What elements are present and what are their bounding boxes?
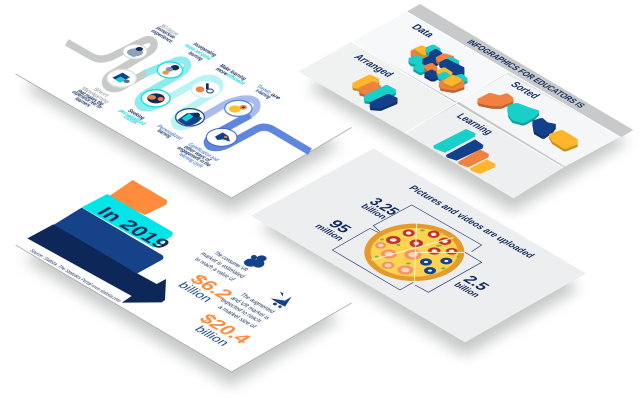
icon: people [244,255,267,268]
timeline labels: engagement in the [175,146,213,168]
chart title: Pictures and videos are uploaded [406,184,536,260]
timeline icon: person with gears [191,81,221,98]
timeline labels: Seeking [126,108,147,121]
stat: augmented and VR market: $20.4 [195,311,257,347]
timeline icon: headset [123,44,147,59]
timeline labels: learning [186,51,205,62]
panel: education timeline card [16,4,352,212]
value: 2.5 billion: billion [452,281,482,299]
stat: consumer VR market [175,251,250,304]
value: 3.25 billion: 3.25 [365,196,403,218]
timeline icon: mobile learning [157,62,183,78]
timeline labels: personalized [117,108,148,126]
leader lines [332,205,482,292]
value: 95 million: million [313,223,346,242]
year heading: In 2019 [92,205,174,252]
section: data [352,12,508,102]
label: data: Data [408,23,437,40]
timeline labels: Trends [254,84,273,95]
panel: infographics for educators card [298,4,633,212]
timeline icon: students [176,109,204,126]
timeline labels: 360-degree [158,23,181,37]
stat: augmented and VR market: a market size of [216,305,258,329]
timeline labels: experience [149,29,175,44]
panel: VR market card [16,176,352,386]
value: 95 million [313,218,355,242]
section: sorted [458,74,621,167]
timeline labels: Personalized [155,124,184,141]
timeline labels: learning [155,128,173,139]
pizza [364,223,464,281]
timeline icon: picture [107,69,136,87]
value: 95 million: 95 [324,218,355,236]
stat: consumer VR market: The consumer VR [212,251,250,273]
stat: augmented and VR market: and VR market is [228,296,272,321]
timeline labels: e-learning [253,88,273,100]
timeline labels: that makes the [75,89,106,107]
label: learning: Learning [453,112,496,136]
timeline icon: gear [225,100,252,116]
timeline labels [70,23,283,169]
icon: shopping cart [271,292,292,308]
timeline labels: more [213,67,230,77]
value: 2.5 billion: 2.5 [459,273,493,293]
cyan band [82,194,173,247]
timeline labels: mobile and global [182,43,213,61]
timeline labels: learning cycle [177,152,205,169]
timeline labels: experience real for [70,90,105,110]
timeline labels: Gamification and [186,142,221,162]
orange band [107,180,167,215]
blue band [53,208,163,273]
stat: consumer VR market: $6.2 [185,271,238,302]
stat: augmented and VR market: The augmented [238,292,276,314]
value: 2.5 billion [452,273,493,299]
timeline labels: Short [91,87,110,98]
navy arrow [27,224,166,303]
section: arranged [298,42,456,133]
timeline labels: Microlearning [79,86,111,105]
arranged stacked blocks [353,76,397,107]
timeline labels: classes [122,115,139,125]
learning bars [433,129,496,174]
section: learning [405,104,563,198]
header band [407,4,633,137]
timeline labels: Incorporating [191,42,218,58]
stat: augmented and VR market: expected to reach [218,298,263,324]
source note: Source: Statista, The Statistics Portal www.statista.com [28,249,122,303]
label: sorted: Sorted [507,80,542,100]
panel: pizza chart card [251,148,586,356]
stat: consumer VR market: to reach a value of [193,257,236,282]
timeline labels: immersive [153,26,177,40]
stat: consumer VR market: billion [175,280,216,304]
timeline labels: are [268,92,283,101]
timeline icon: globe [141,90,170,107]
value: 3.25 billion: billion [359,203,389,220]
timeline labels: other ways of [182,145,213,163]
winding path [67,40,310,152]
stat: consumer VR market: market is estimated [198,251,246,279]
timeline labels: efficient [224,73,247,86]
timeline labels: Make learning [217,63,248,81]
timeline labels: learners [73,96,93,108]
label: arranged: Arranged [351,53,396,79]
heading: INFOGRAPHICS FOR EDUCATORS IS [465,38,587,109]
timeline icon: game controller [206,128,237,146]
stat: augmented and VR market [191,292,276,348]
data scattered blocks [409,46,467,89]
sorted block groups [478,94,577,148]
stat: augmented and VR market: billion [191,324,232,348]
